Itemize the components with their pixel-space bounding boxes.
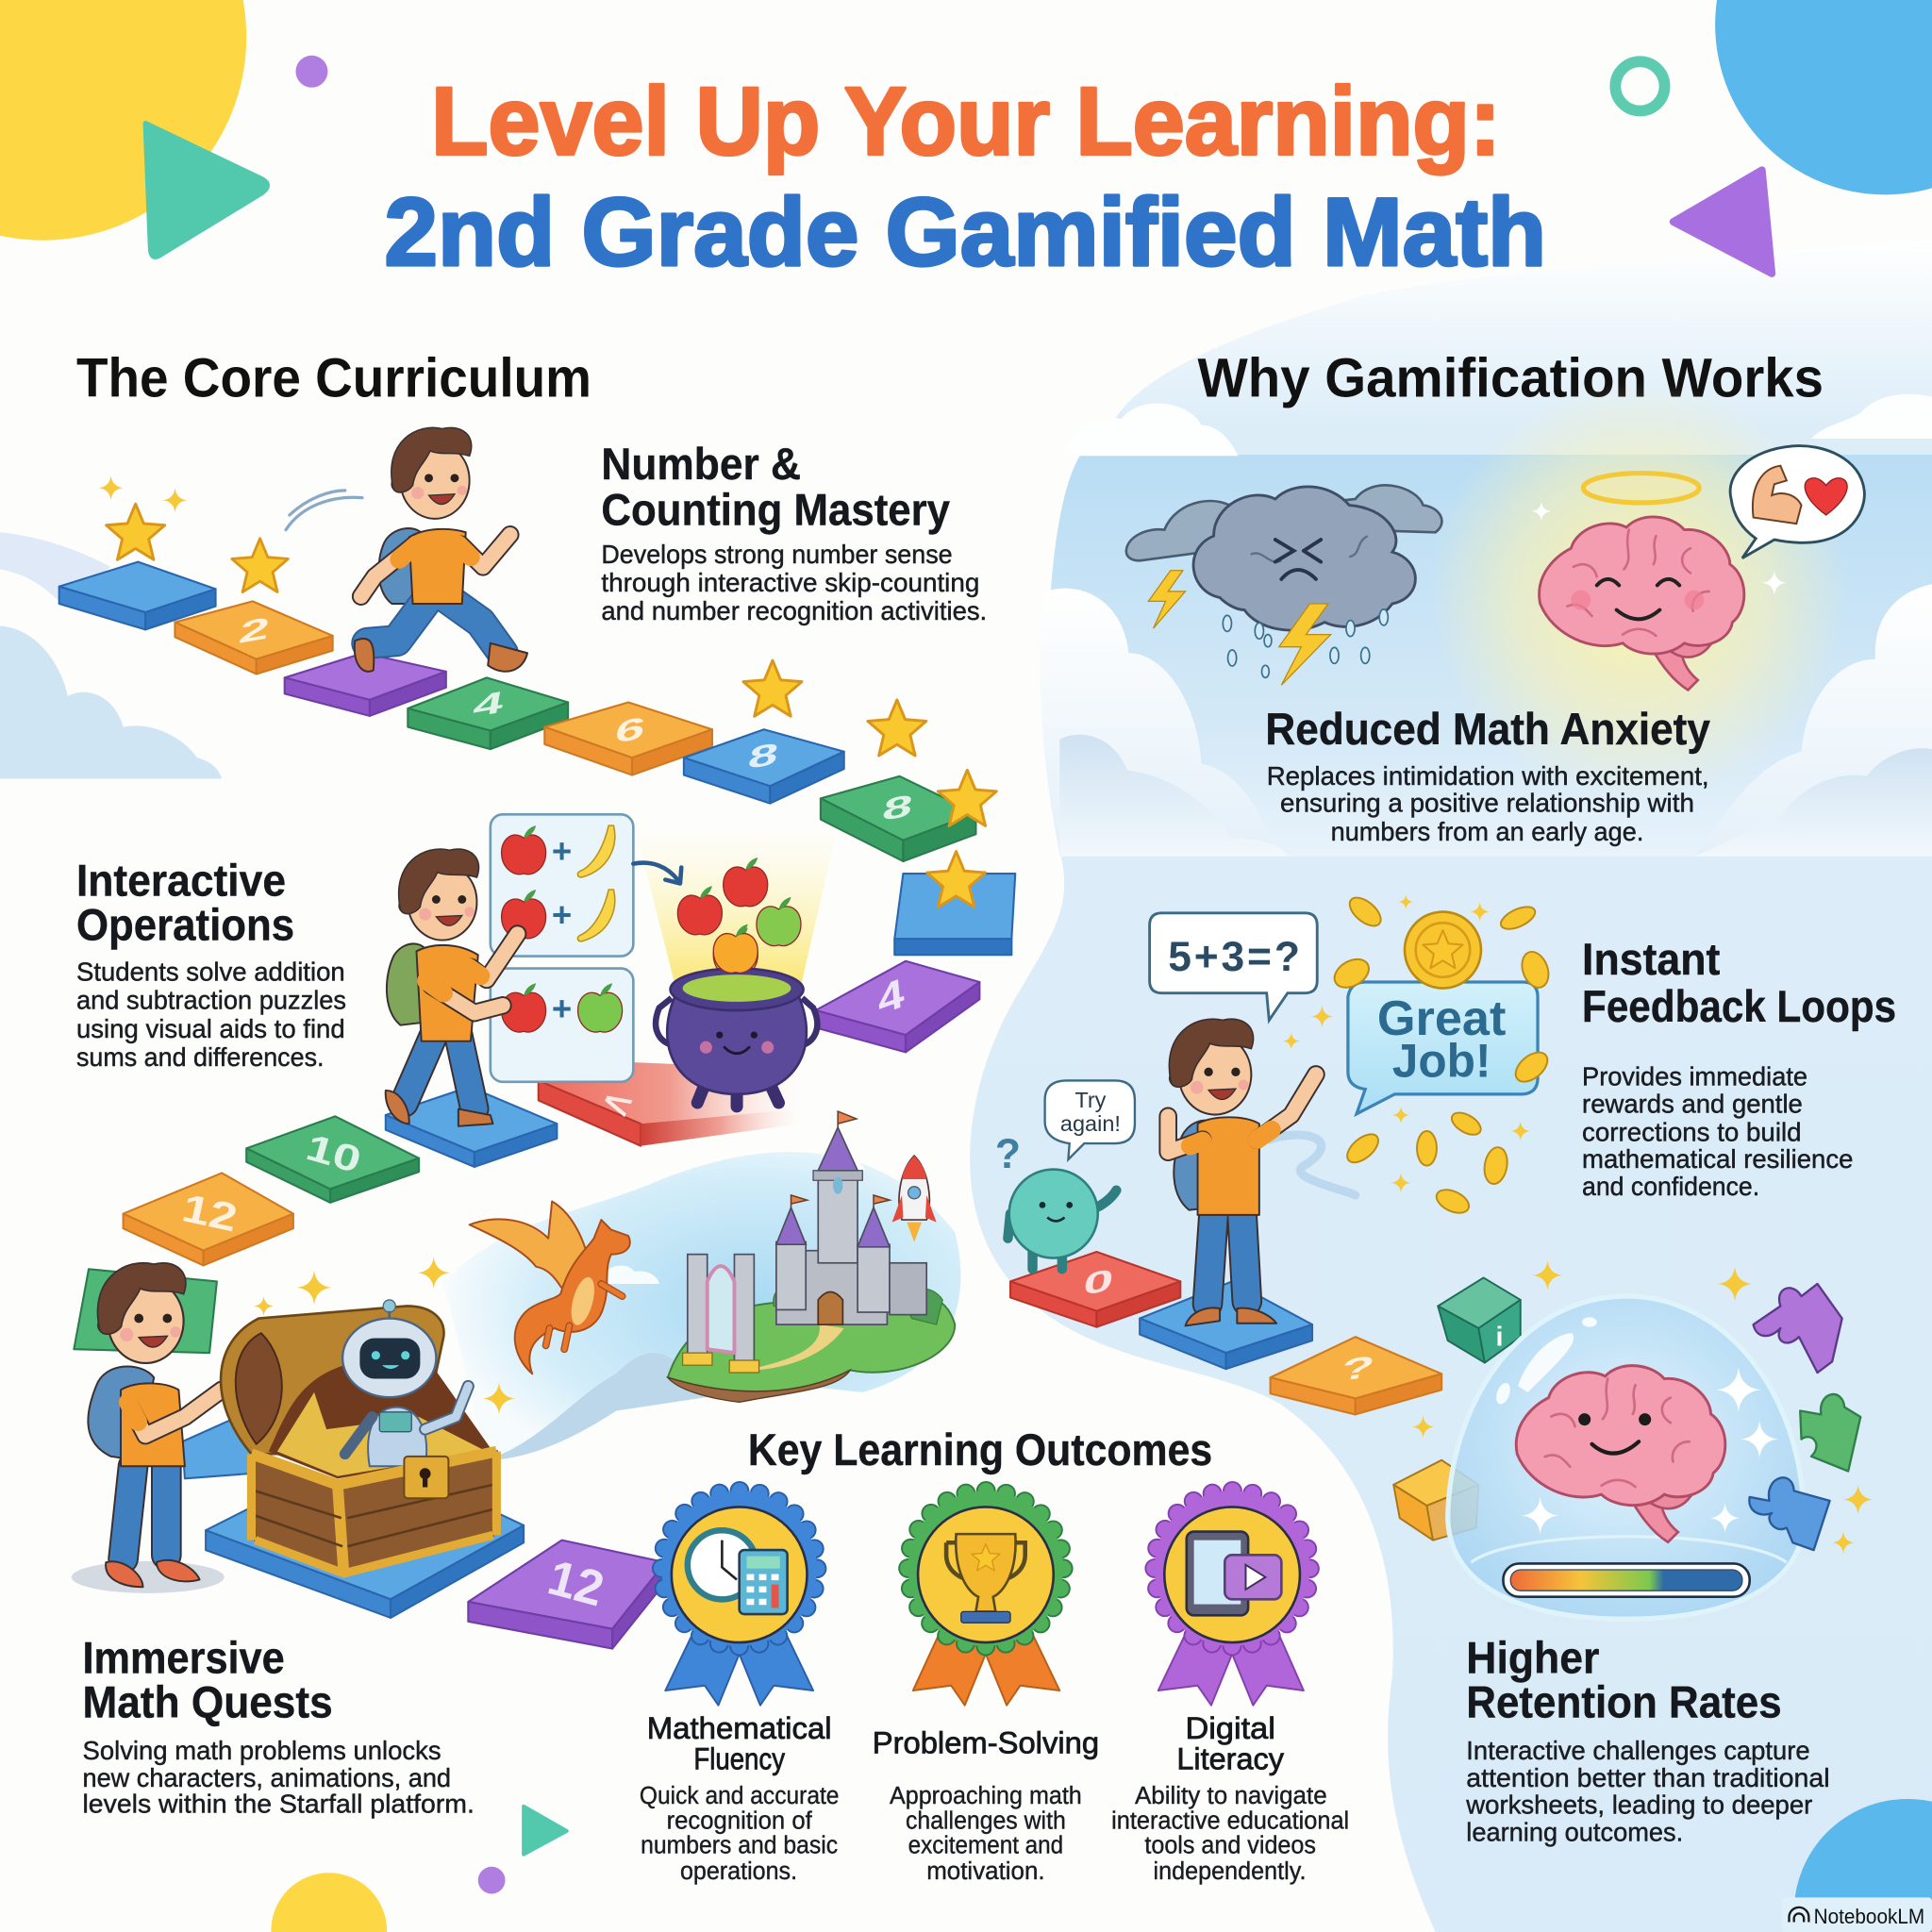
tile: red 0: 0	[1080, 1261, 1116, 1302]
rain drops	[1223, 609, 1388, 677]
text: Number & Counting Mastery: and number recognition activities.	[601, 596, 987, 625]
decoration: teal ring	[1615, 61, 1665, 111]
green cube: i	[1496, 1322, 1504, 1352]
badge: Mathematical Fluency: Quick and accurate	[640, 1783, 839, 1809]
torso	[1198, 1117, 1259, 1215]
text: Higher Retention Rates: Higher	[1466, 1633, 1599, 1683]
text: Interactive Operations: Operations	[76, 900, 294, 950]
badge: Digital Literacy: Ability to navigate	[1135, 1783, 1327, 1809]
bushes	[774, 1288, 942, 1324]
puzzle cards: +	[552, 831, 572, 870]
badge: Digital Literacy: Literacy	[1176, 1741, 1285, 1776]
face	[1275, 540, 1321, 579]
torso	[409, 529, 466, 604]
backpack	[1174, 1121, 1220, 1210]
NotebookLM badge	[1782, 1897, 1932, 1932]
tile: purple 4: 4	[876, 970, 906, 1024]
yellow cube	[1393, 1460, 1478, 1541]
text: Immersive Math Quests	[83, 1633, 475, 1818]
badge: Digital Literacy: independently.	[1154, 1858, 1306, 1885]
heading: Key Learning Outcomes: Key Learning Outcomes	[748, 1424, 1212, 1474]
badge: Problem-Solving: motivation.	[926, 1858, 1045, 1885]
badge: Mathematical Fluency: numbers and basic	[641, 1832, 838, 1858]
front cloud	[1193, 487, 1415, 630]
game path tiles	[59, 562, 1441, 1649]
badge: Digital Literacy: tools and videos	[1144, 1832, 1316, 1858]
boy running	[286, 427, 527, 672]
text: Reduced Math Anxiety: numbers from an early age.	[1331, 817, 1643, 846]
orange fruit in front of cauldron rim	[713, 924, 758, 973]
tile: orange question: ?	[1338, 1348, 1377, 1388]
dragon	[470, 1201, 630, 1374]
heading: Why Gamification Works: Why Gamification Works	[1198, 348, 1824, 409]
lid	[221, 1306, 443, 1454]
clock	[688, 1530, 757, 1599]
tile: purple 12: 12	[542, 1550, 609, 1617]
tile: blue under boy	[1140, 1281, 1312, 1369]
text: Interactive Operations: Interactive	[76, 856, 286, 906]
small clouds	[604, 1157, 865, 1284]
speech bubble: Great Job	[1348, 982, 1538, 1114]
text: Interactive Operations: Students solve addition	[76, 958, 345, 987]
NotebookLM badge: NotebookLM	[1814, 1905, 1924, 1928]
portal	[683, 1255, 759, 1373]
text: Instant Feedback Loops: and confidence.	[1582, 1172, 1759, 1201]
text: Interactive Operations	[76, 856, 346, 1072]
tile: 8 green	[821, 776, 975, 861]
badge: Mathematical Fluency: operations.	[680, 1858, 797, 1885]
fantasy world scene	[443, 1111, 960, 1460]
tile: 8 blue	[684, 729, 844, 804]
lightning	[1148, 571, 1185, 628]
speech bubble: Try again: Try	[1074, 1088, 1107, 1112]
tile: purple 4	[816, 961, 979, 1052]
tile: 12 orange	[124, 1173, 293, 1265]
puzzle cards	[491, 814, 633, 1082]
boy cheering	[1168, 1019, 1316, 1325]
sparkles near brain	[1532, 502, 1787, 595]
tile: green behind boy	[74, 1269, 217, 1353]
arm	[129, 1390, 222, 1436]
legs	[404, 1035, 475, 1109]
shoes	[386, 1091, 492, 1126]
text: Instant Feedback Loops: Instant	[1582, 934, 1721, 984]
arms	[431, 934, 518, 1013]
cauldron	[656, 969, 817, 1107]
chest box	[251, 1452, 496, 1574]
tile: 10	[246, 1116, 419, 1203]
lock	[404, 1457, 448, 1498]
badge: Mathematical Fluency: recognition of	[667, 1807, 813, 1834]
text: Instant Feedback Loops: Provides immediate	[1582, 1062, 1807, 1091]
smiling brain in dome	[1516, 1366, 1725, 1542]
treasure chest with robot	[221, 1300, 496, 1574]
tablet and video	[1187, 1532, 1281, 1615]
tile: blue start	[59, 562, 216, 629]
storm cloud	[1126, 485, 1441, 685]
rear clouds	[1126, 485, 1441, 560]
text: Instant Feedback Loops: rewards and gentle	[1582, 1089, 1803, 1118]
shadow	[72, 1561, 225, 1593]
text: Immersive Math Quests: Solving math problems unlocks	[83, 1736, 441, 1765]
speech bubble: Try again	[1045, 1080, 1135, 1159]
interior	[269, 1356, 492, 1478]
clouds in sky panel	[1041, 394, 1932, 857]
text: Number & Counting Mastery: Develops strong number sense	[601, 540, 953, 569]
calculator	[740, 1550, 788, 1614]
text: Instant Feedback Loops	[1582, 934, 1896, 1201]
shoes	[1185, 1307, 1276, 1325]
text: Instant Feedback Loops: corrections to build	[1582, 1117, 1802, 1146]
tile: 2: 2	[237, 609, 273, 650]
text: Higher Retention Rates: attention better than traditional	[1466, 1763, 1830, 1792]
text: Instant Feedback Loops: Feedback Loops	[1582, 981, 1896, 1031]
arrow to cauldron	[633, 863, 681, 883]
background: pale sky region	[1062, 241, 1932, 862]
backpack	[378, 528, 425, 604]
teal character	[1008, 1170, 1116, 1269]
shoes	[106, 1560, 200, 1587]
tile: 8 blue: 8	[745, 736, 781, 775]
text: Interactive Operations: sums and differences.	[76, 1042, 325, 1072]
tile: red chevron: <	[596, 1079, 639, 1127]
tile: 8 green: 8	[880, 787, 916, 827]
halo	[1583, 474, 1699, 503]
arms	[1168, 1074, 1316, 1152]
puzzle piece: green	[1800, 1394, 1860, 1472]
tile: 10: 10	[302, 1125, 366, 1181]
decoration: small teal triangle	[524, 1807, 567, 1855]
green cube	[1438, 1277, 1521, 1363]
arms	[361, 535, 510, 596]
tile: 4: 4	[471, 684, 507, 724]
speech bubble: Try again: again!	[1060, 1111, 1121, 1136]
heading: The Core Curriculum: The Core Curriculum	[76, 348, 591, 409]
text: Higher Retention Rates: worksheets, leading to deeper	[1465, 1790, 1812, 1820]
sky blob	[443, 1152, 960, 1460]
decoration: blue circle	[1715, 0, 1932, 194]
puzzle piece: purple	[1754, 1284, 1842, 1373]
background: lower right blob	[970, 850, 1932, 1932]
island	[668, 1294, 955, 1391]
speech bubble: muscle and heart	[1730, 446, 1864, 558]
badge: Problem-Solving: challenges with	[906, 1807, 1066, 1834]
motion lines	[286, 491, 362, 530]
tile: purple 12	[468, 1541, 665, 1649]
mountains	[487, 1353, 740, 1460]
decoration: bottom right blue circle	[1794, 1799, 1932, 1932]
left swoosh	[0, 532, 111, 604]
tile: orange question	[1271, 1337, 1441, 1414]
tile: 2	[175, 601, 333, 674]
torso	[416, 945, 478, 1041]
puzzle cards: +	[552, 989, 572, 1027]
boy with puzzles	[386, 849, 518, 1126]
decoration: small purple dot	[478, 1867, 506, 1894]
text: Higher Retention Rates	[1465, 1633, 1830, 1846]
badge: Problem-Solving: Problem-Solving	[873, 1725, 1099, 1760]
badge: Mathematical Fluency	[640, 1491, 839, 1885]
brain glow	[1429, 382, 1848, 801]
text: Reduced Math Anxiety: ensuring a positive relationship with	[1280, 789, 1694, 818]
badge: Mathematical Fluency: Fluency	[693, 1741, 786, 1776]
legs	[124, 1466, 166, 1558]
badge: Digital Literacy: Digital	[1185, 1710, 1275, 1745]
text: Reduced Math Anxiety	[1265, 704, 1710, 846]
text: Immersive Math Quests: Immersive	[83, 1633, 285, 1683]
path on island	[740, 1324, 844, 1372]
badge: Mathematical Fluency: Mathematical	[647, 1710, 832, 1745]
puzzle cards: +	[552, 895, 572, 934]
rocket	[892, 1156, 937, 1242]
tile: 6: 6	[612, 709, 648, 750]
text: Number & Counting Mastery: Number &	[601, 439, 801, 489]
boy at treasure chest	[72, 1263, 225, 1593]
badge: Digital Literacy: interactive educational	[1111, 1807, 1349, 1834]
fruit above cauldron	[677, 858, 801, 976]
dome sparkles	[1412, 1260, 1873, 1554]
text: Interactive Operations: using visual aids to find	[76, 1014, 345, 1043]
decoration: bottom yellow circle	[271, 1873, 387, 1932]
text: Higher Retention Rates: learning outcomes.	[1466, 1817, 1683, 1846]
question mark: ?	[995, 1131, 1021, 1177]
tile: 6	[544, 702, 712, 775]
puzzle piece: blue	[1749, 1477, 1830, 1550]
text: Reduced Math Anxiety: Replaces intimidation with excitement,	[1267, 761, 1709, 791]
speech bubble: Great Job: Great	[1377, 991, 1506, 1046]
robot	[342, 1300, 468, 1466]
progress bar	[1503, 1563, 1750, 1597]
decoration: teal triangle	[145, 124, 267, 257]
stars on path	[98, 475, 996, 908]
text: Immersive Math Quests: new characters, animations, and	[83, 1763, 451, 1792]
background: anxiety panel sky	[1048, 455, 1932, 857]
tile: red 0	[1010, 1252, 1180, 1327]
cauldron glow	[635, 825, 838, 986]
glass dome	[1448, 1296, 1804, 1619]
green backpack	[387, 943, 429, 1025]
text: Number & Counting Mastery	[601, 439, 987, 625]
castle	[776, 1111, 926, 1324]
decoration: purple triangle	[1674, 170, 1772, 274]
speech bubble: 5+3=?: 5+3=?	[1168, 934, 1300, 980]
text: Higher Retention Rates: Retention Rates	[1466, 1677, 1782, 1727]
badge: Problem-Solving	[873, 1491, 1099, 1885]
tile: big blue under chest	[182, 1405, 524, 1618]
text: Immersive Math Quests: levels within the Starfall platform.	[83, 1789, 475, 1818]
text: Number & Counting Mastery: Counting Mastery	[601, 484, 950, 534]
legs	[367, 597, 503, 653]
text: Immersive Math Quests: Math Quests	[83, 1677, 333, 1727]
text: Higher Retention Rates: Interactive challenges capture	[1466, 1736, 1810, 1765]
title: Level Up Your Learning:	[431, 67, 1501, 175]
badge: Problem-Solving: Approaching math	[890, 1783, 1082, 1809]
text: Reduced Math Anxiety: Reduced Math Anxiety	[1265, 704, 1710, 754]
shoes	[355, 639, 527, 672]
torso	[121, 1383, 185, 1466]
decoration: purple dot	[295, 56, 327, 88]
tile: blue star block	[894, 874, 1015, 955]
tile: purple	[285, 653, 446, 716]
trophy	[946, 1534, 1025, 1623]
sparkles near chest	[254, 1257, 515, 1414]
happy brain	[1540, 517, 1744, 690]
speech bubble: 5+3=?	[1150, 913, 1317, 1020]
speech bubble: Great Job: Job!	[1392, 1035, 1491, 1088]
decoration: yellow circle	[0, 0, 246, 241]
tile: red chevron	[539, 1062, 801, 1146]
tile: 12 orange: 12	[178, 1186, 242, 1241]
legs	[1208, 1214, 1247, 1304]
backpack	[88, 1366, 154, 1460]
text: Interactive Operations: and subtraction puzzles	[76, 986, 346, 1015]
coins	[1283, 892, 1553, 1218]
tile: blue under walking boy	[386, 1087, 557, 1167]
badge: Problem-Solving: excitement and	[908, 1832, 1063, 1858]
text: Instant Feedback Loops: mathematical resilience	[1582, 1144, 1853, 1174]
badge: Digital Literacy	[1111, 1491, 1349, 1885]
title	[385, 67, 1546, 286]
swirl path behind boy	[1269, 1135, 1356, 1195]
left cloud	[0, 626, 222, 778]
title: 2nd Grade Gamified Math	[385, 178, 1546, 286]
text: Number & Counting Mastery: through interactive skip-counting	[601, 568, 979, 597]
tile: 4	[408, 677, 568, 749]
